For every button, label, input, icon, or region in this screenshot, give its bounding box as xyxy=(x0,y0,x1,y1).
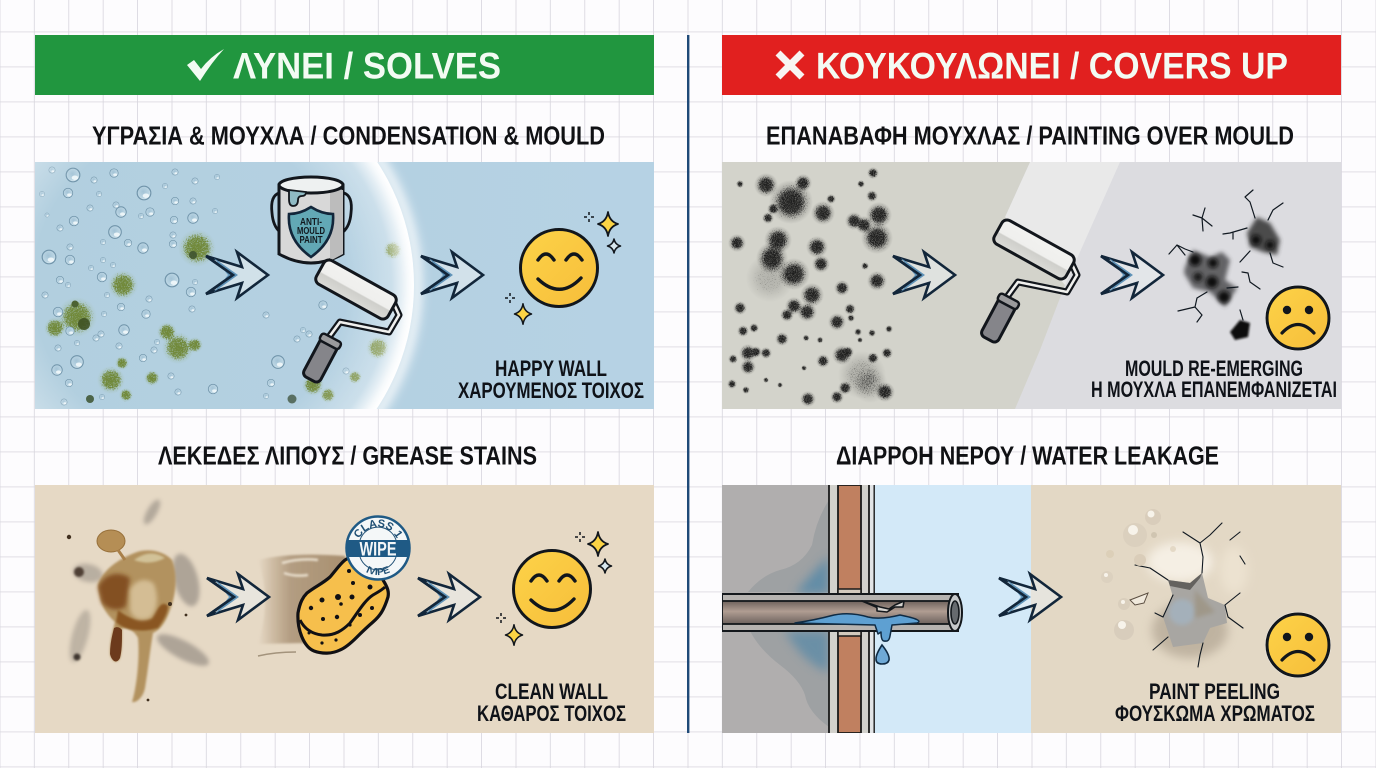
caption: paint peeling: ΦΟΥΣΚΩΜΑ ΧΡΩΜΑΤΟΣ xyxy=(1115,701,1315,726)
header: solves xyxy=(35,35,654,95)
water drop xyxy=(876,645,889,664)
mop-up halo xyxy=(35,162,428,409)
centre divider xyxy=(687,35,689,733)
icon: happy face xyxy=(512,549,592,629)
icon: paint roller xyxy=(978,218,1077,344)
icon: class 1 wipe badge: CLASS 1 xyxy=(354,520,402,538)
black mould spots xyxy=(727,167,895,407)
panel: grease stains xyxy=(35,485,654,733)
arrow 1 xyxy=(206,252,268,298)
icon: paint can: ANTI- xyxy=(300,217,322,228)
caption: clean wall: ΚΑΘΑΡΟΣ ΤΟΙΧΟΣ xyxy=(477,701,626,726)
re-emerging mould through cracked paint xyxy=(1169,190,1283,340)
arrow xyxy=(999,574,1061,620)
panel: condensation and mould xyxy=(35,162,654,409)
heading: water leakage: ΔΙΑΡΡΟΗ ΝΕΡΟΥ / WATER LEAKAGE xyxy=(836,440,1219,470)
brick wall section xyxy=(829,485,874,733)
arrow 2 xyxy=(1101,252,1163,298)
arrow 2 xyxy=(418,574,480,620)
caption: paint peeling xyxy=(1115,679,1315,726)
icon: class 1 wipe badge xyxy=(345,515,411,581)
cracks xyxy=(1169,190,1283,322)
crack xyxy=(862,601,904,612)
caption: mould re-emerging: MOULD RE-EMERGING xyxy=(1125,356,1303,381)
icon: cross mark xyxy=(778,53,802,77)
icon: paint roller xyxy=(300,258,399,384)
heading: condensation and mould: ΥΓΡΑΣΙΑ & ΜΟΥΧΛΑ / CONDENSATION & MOULD xyxy=(92,120,605,150)
caption: paint peeling: PAINT PEELING xyxy=(1149,679,1280,704)
wipe swipe xyxy=(258,554,346,657)
caption: clean wall xyxy=(478,684,626,721)
heading text: solves: ΛΥΝΕΙ / SOLVES xyxy=(233,46,501,86)
icon: check mark xyxy=(187,49,224,81)
heading: grease stains: ΛΕΚΕΔΕΣ ΛΙΠΟΥΣ / GREASE STAINS xyxy=(158,440,537,470)
icon: sad face xyxy=(1265,612,1331,678)
mould patches xyxy=(44,229,403,404)
caption: happy wall xyxy=(458,360,644,398)
icon: sponge xyxy=(298,557,388,653)
arrow 1 xyxy=(207,574,269,620)
icon: sad face xyxy=(1265,285,1331,351)
heading text: covers up: ΚΟΥΚΟΥΛΩΝΕΙ / COVERS UP xyxy=(816,46,1288,86)
arrow 2 xyxy=(421,252,483,298)
caption: mould re-emerging xyxy=(1092,360,1336,397)
icon: sparkles xyxy=(496,532,612,645)
water droplets xyxy=(39,167,349,405)
icon: class 1 wipe badge: WIPE xyxy=(360,540,396,560)
peeling paint damage xyxy=(1101,509,1248,667)
leaking pipe xyxy=(722,594,962,664)
icon: paint can: MOULD xyxy=(297,226,325,237)
icon: class 1 wipe badge: IVIPE xyxy=(366,566,390,576)
grease stain xyxy=(65,497,213,702)
water xyxy=(795,614,919,641)
icon: happy face xyxy=(519,228,599,308)
header: covers up xyxy=(722,35,1341,95)
panel: water leakage xyxy=(722,485,1341,733)
caption: clean wall: CLEAN WALL xyxy=(495,679,608,704)
caption: happy wall: HAPPY WALL xyxy=(495,356,607,381)
icon: sparkles xyxy=(505,212,620,324)
icon: shield badge xyxy=(289,207,333,257)
icon: paint can: PAINT xyxy=(300,235,322,246)
arrow 1 xyxy=(893,252,955,298)
panel: painting over mould xyxy=(722,162,1341,409)
damp stain on wall xyxy=(748,500,829,727)
caption: happy wall: ΧΑΡΟΥΜΕΝΟΣ ΤΟΙΧΟΣ xyxy=(458,378,644,403)
icon: paint can xyxy=(272,177,351,263)
